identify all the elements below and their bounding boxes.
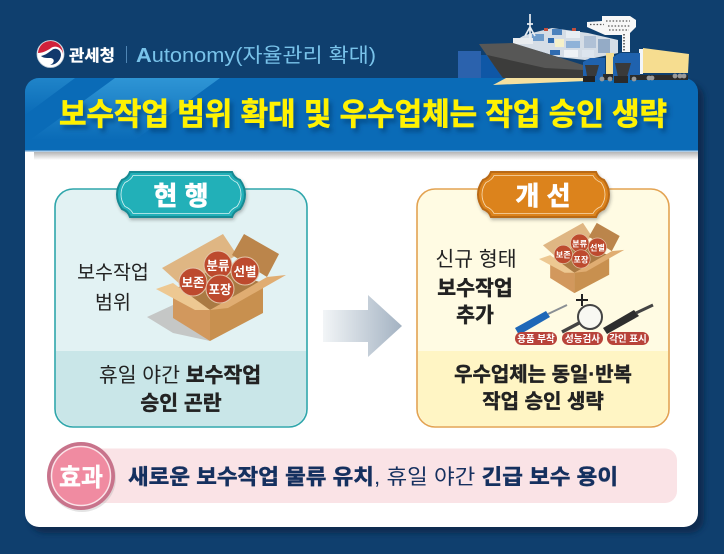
trucks [583,48,689,83]
dock [493,78,586,85]
panel note: 우수업체는 동일·반복 [454,363,632,386]
agency name: 관세청 [69,47,115,65]
icon: marking tool [603,305,653,334]
icon: open box [147,234,286,341]
chip: storage: 보존 [556,251,571,260]
panel: improved [417,172,669,427]
panel: current [55,172,307,427]
chip: sorting: 분류 [572,240,588,249]
illustration: cargo ship and trucks [458,14,689,85]
effect background [85,448,677,503]
icon: taegeuk emblem [37,40,64,68]
panel lower band [418,351,668,426]
chip: packing: 포장 [573,254,589,264]
chip: selection: 선별 [590,242,605,252]
label: repair scope: 범위 [95,292,131,314]
port crane tower [587,16,636,52]
icon: screwdriver [515,305,567,335]
ship mast [525,14,535,42]
card shadow [30,84,704,533]
subtitle: Autonomy(자율관리 확대) [136,44,376,67]
chip: packing: 포장 [208,283,232,297]
plus sign [576,294,588,306]
badge: current: 현 행 [153,181,209,211]
effect bar [47,442,677,512]
chip: part attachment: 용품 부착 [517,333,555,345]
white card [25,90,698,527]
title: 보수작업 범위 확대 및 우수업체는 작업 승인 생략 [59,97,667,132]
arrow [323,295,402,357]
cab one [583,58,605,80]
label: new type repair work: 추가 [456,304,494,327]
containers behind [458,51,481,78]
ship cargo [513,28,618,60]
chip: storage: 보존 [181,276,205,290]
badge: effect: 효과 [59,464,103,492]
badge: effect [47,442,116,512]
ship hull [479,43,583,78]
cab two [613,53,640,78]
badge: improved [478,172,609,217]
panel lower band [56,351,306,426]
chip: performance test: 성능검사 [565,333,600,345]
divider [126,46,127,63]
header under-shadow [34,152,698,160]
panel note: 작업 승인 생략 [482,390,604,413]
trailer one [606,53,614,74]
panel body [55,189,307,427]
logo: Korea Customs Service [37,40,115,68]
icon: small open box [539,223,624,293]
trailer two [643,48,689,73]
badge: improved: 개 선 [515,181,571,211]
panel body [417,189,669,427]
chip: sorting: 분류 [206,259,230,273]
panel note: 승인 곤란 [140,392,222,415]
chip: engraving: 각인 표시 [609,333,647,345]
icon: magnifier [562,305,602,332]
chassis and wheels [603,74,688,80]
effect text: 새로운 보수작업 물류 유치 , 휴일 야간 긴급 보수 용이 [128,466,618,489]
badge: current [117,172,245,217]
label: repair scope: 보수작업 [77,262,149,284]
label: new type repair work: 신규 형태 [435,248,517,271]
header band [25,78,698,152]
chip: selection: 선별 [233,265,257,279]
panel note: 휴일 야간 보수작업 [99,364,261,387]
label: new type repair work: 보수작업 [437,277,513,300]
